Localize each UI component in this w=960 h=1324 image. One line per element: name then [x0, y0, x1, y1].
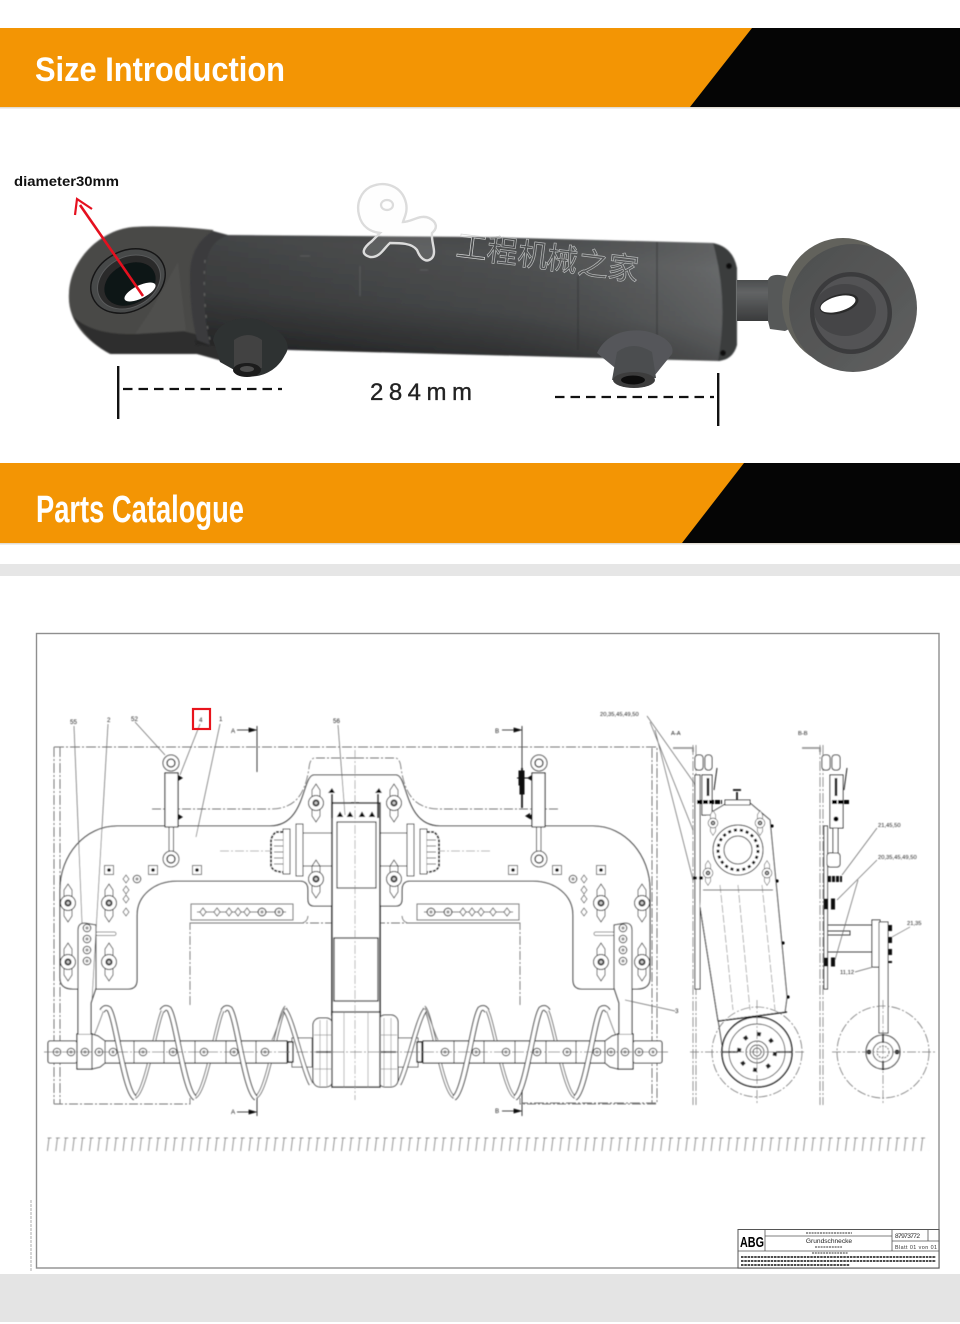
- hydraulic valve: [517, 768, 530, 819]
- housing: [700, 803, 787, 1021]
- part numbers: 3: [675, 1008, 679, 1015]
- banner: size introduction: [0, 28, 960, 108]
- cylinder barrel: [190, 231, 737, 361]
- technical drawing: section B-B: 21,35: [907, 921, 922, 927]
- heading: parts catalogue: Parts Catalogue: [36, 489, 244, 531]
- part numbers: 1: [219, 716, 223, 723]
- technical drawing: section B-B: [798, 731, 936, 1105]
- technical drawing: section B-B: 11,12: [840, 970, 854, 976]
- banner: parts catalogue: [0, 463, 960, 544]
- watermark: horse logo: [358, 184, 436, 260]
- drawing number: 87973772: [895, 1233, 920, 1240]
- part numbers: 52: [131, 716, 138, 723]
- title block: [738, 1230, 939, 1268]
- watermark text: [454, 228, 641, 288]
- technical drawing: section A-A: A-A: [671, 731, 681, 737]
- wheel: [712, 1007, 802, 1097]
- dimension tick row: [44, 1137, 929, 1152]
- sheet number: Blatt 01 von 01: [895, 1245, 937, 1251]
- callout: diameter arrow: [75, 199, 143, 296]
- watermark text: 家: [606, 249, 641, 288]
- dimension: length right: [555, 373, 719, 426]
- red marker: part 4: [193, 709, 210, 729]
- divider band: [0, 564, 960, 576]
- part numbers: A: [231, 1109, 236, 1116]
- watermark text: 工: [454, 228, 489, 267]
- left clevis bore: [79, 236, 177, 326]
- watermark text: 程: [485, 232, 520, 271]
- part numbers: B: [495, 728, 499, 735]
- dimension: length label: 284mm: [370, 379, 472, 406]
- part numbers: 4: [199, 717, 203, 724]
- technical drawing: section A-A: [671, 731, 805, 1105]
- margin note: [30, 1200, 32, 1272]
- heading: size introduction: Size Introduction: [35, 51, 285, 89]
- technical drawing: front view: [44, 712, 697, 1116]
- technical drawing: section B-B: 21,45,50: [878, 823, 901, 829]
- watermark text: 机: [516, 236, 551, 275]
- part numbers: B: [495, 1108, 499, 1115]
- center column: [313, 750, 398, 1100]
- callout: diameter label: diameter30mm: [14, 174, 119, 189]
- panel: hydraulic cylinder photo: [14, 174, 917, 426]
- panel: parts drawing sheet: [31, 634, 939, 1272]
- part numbers: 2: [107, 717, 111, 724]
- footer band: [0, 1274, 960, 1322]
- watermark text: 之: [576, 245, 611, 284]
- part numbers: [70, 712, 679, 1116]
- piston rod: [737, 275, 798, 331]
- technical drawing: section B-B: B-B: [798, 731, 808, 737]
- watermark text: 械: [545, 240, 580, 279]
- dimension: length left: [117, 366, 282, 419]
- drawing title: Grundschnecke: [806, 1238, 852, 1245]
- logo: ABG: ABG: [740, 1235, 764, 1251]
- oil port left: [213, 318, 288, 377]
- oil port right: [597, 330, 673, 388]
- leader lines: [74, 716, 697, 1011]
- part numbers: 56: [333, 718, 340, 725]
- cylinder clevis end: [69, 226, 226, 362]
- technical drawing: section B-B: 20,35,45,49,50: [878, 855, 917, 861]
- section marks: [237, 726, 522, 1116]
- rod eye: [782, 238, 917, 372]
- fine print: [741, 1257, 936, 1265]
- part numbers: A: [231, 728, 236, 735]
- part numbers: 55: [70, 719, 77, 726]
- part numbers: 20,35,45,49,50: [600, 712, 639, 718]
